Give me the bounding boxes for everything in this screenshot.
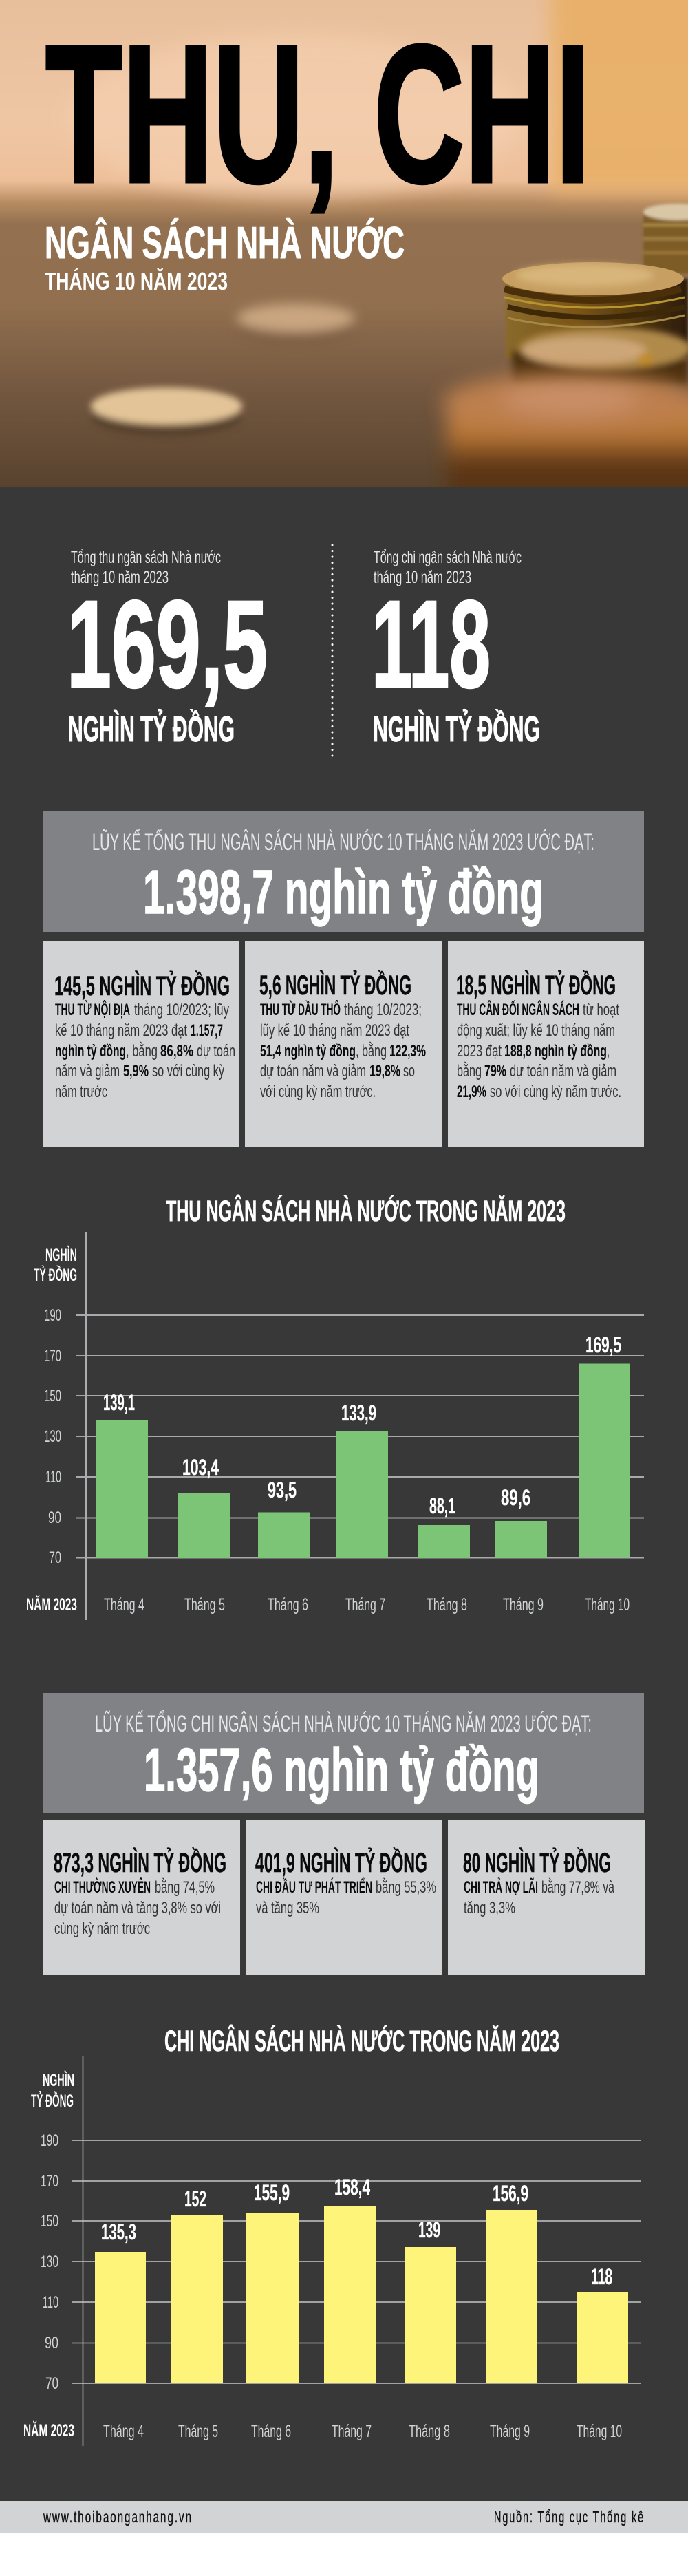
bar chart: monthly expenditure: 150 (41, 2212, 58, 2231)
subtitle: NGÂN SÁCH NHÀ NƯỚC (45, 217, 405, 268)
bar chart: monthly expenditure: 130 (41, 2253, 58, 2271)
bar chart: monthly expenditure: NĂM 2023 (23, 2420, 74, 2440)
coin: blurred coin over stack (513, 328, 688, 385)
bar chart: monthly expenditure: 139 (418, 2217, 440, 2242)
panel: interest payment expenditure: bằng 77,8% và (541, 1878, 614, 1897)
panel: regular expenditure: dự toán năm và tăng 3,8% so với (54, 1899, 221, 1917)
panel: crude oil revenue: 19,8% (369, 1062, 400, 1081)
key figure: total expenditure: Tổng chi ngân sách Nhà nước (374, 548, 522, 567)
bar chart: monthly expenditure: 110 (43, 2293, 58, 2312)
bar chart: monthly revenue: 169,5 (585, 1332, 621, 1357)
bar chart: monthly revenue: Tháng 8 (427, 1595, 467, 1615)
footer: www.thoibaonganhang.vn (43, 2508, 193, 2526)
panel: budget balance revenue (448, 941, 644, 1147)
panel: regular expenditure: bằng 74,5% (155, 1878, 215, 1897)
bar chart: monthly expenditure: Tháng 6 (251, 2422, 291, 2441)
panel: development investment expenditure: bằng 55,3% (376, 1878, 436, 1897)
panel: budget balance revenue: 188,8 nghìn tỷ đồng (504, 1042, 607, 1061)
bar chart: monthly revenue: Tháng 10 (585, 1595, 630, 1615)
bar chart: monthly expenditure: TỶ ĐỒNG (31, 2090, 74, 2111)
panel: domestic revenue: năm và giảm (55, 1062, 120, 1081)
panel: crude oil revenue: lũy kế 10 tháng năm 2023 đạt (260, 1021, 409, 1040)
panel: crude oil revenue: 5,6 NGHÌN TỶ ĐỒNG (259, 969, 411, 1001)
bar chart: monthly revenue: Tháng 9 (503, 1595, 544, 1615)
panel: budget balance revenue: động xuất; lũy kế 10 tháng năm (457, 1021, 615, 1040)
divider (332, 545, 333, 756)
bar chart: monthly expenditure: Tháng 8 (409, 2422, 450, 2441)
panel: interest payment expenditure (448, 1820, 645, 1975)
panel: crude oil revenue: dự toán năm và giảm (260, 1062, 366, 1081)
key figure: total revenue: tháng 10 năm 2023 (71, 568, 169, 587)
bar chart: monthly expenditure: Tháng 9 (490, 2422, 530, 2441)
panel: domestic revenue: nghìn tỷ đồng (55, 1042, 126, 1061)
panel: crude oil revenue: THU TỪ DẦU THÔ (260, 1000, 341, 1019)
coin: foreground blurred stack (434, 362, 688, 487)
panel: regular expenditure: 873,3 NGHÌN TỶ ĐỒNG (54, 1846, 226, 1878)
panel: development investment expenditure: và tăng 35% (256, 1899, 319, 1917)
bar chart: monthly expenditure: 156,9 (493, 2181, 528, 2206)
panel: budget balance revenue: dự toán năm và giảm (510, 1062, 616, 1081)
bar chart: monthly revenue: 103,4 (182, 1455, 219, 1480)
coin: sharp middle stack (502, 262, 688, 358)
panel: development investment expenditure (246, 1820, 442, 1975)
panel: crude oil revenue: 51,4 nghìn tỷ đồng (260, 1042, 356, 1061)
bar chart: monthly expenditure: Tháng 5 (178, 2422, 218, 2441)
bar chart: monthly expenditure: 170 (41, 2172, 58, 2191)
bar chart: monthly revenue: 90 (48, 1509, 61, 1527)
panel: budget balance revenue: 2023 đạt (457, 1042, 502, 1061)
panel: domestic revenue: năm trước (55, 1083, 107, 1101)
bar chart: monthly expenditure: 155,9 (254, 2180, 290, 2205)
bar chart: monthly revenue: 88,1 (429, 1493, 455, 1518)
panel: domestic revenue: so với cùng kỳ (152, 1062, 224, 1081)
panel: budget balance revenue: , (607, 1042, 610, 1061)
bar chart: monthly revenue: Tháng 4 (104, 1595, 144, 1615)
panel: regular expenditure (43, 1820, 240, 1975)
panel: budget balance revenue: từ hoạt (583, 1001, 619, 1019)
bar chart: monthly revenue: 89,6 (501, 1485, 530, 1510)
key figure: total expenditure: tháng 10 năm 2023 (374, 568, 471, 587)
panel: crude oil revenue: , bằng (356, 1042, 387, 1061)
hero photo: blurred coins on a table (0, 0, 688, 526)
bottom margin (0, 2533, 688, 2576)
bar chart: monthly revenue: TỶ ĐỒNG (34, 1264, 77, 1285)
panel: regular expenditure: CHI THƯỜNG XUYÊN (54, 1877, 151, 1897)
bar chart: monthly revenue: Tháng 7 (345, 1595, 385, 1615)
panel: budget balance revenue: bằng (457, 1062, 482, 1081)
bar chart: monthly expenditure: 135,3 (101, 2220, 136, 2244)
key figure: total revenue: NGHÌN TỶ ĐỒNG (68, 709, 235, 749)
panel: domestic revenue: THU TỪ NỘI ĐỊA (55, 1000, 130, 1019)
panel: crude oil revenue: với cùng kỳ năm trước. (260, 1083, 376, 1101)
panel: budget balance revenue: THU CÂN ĐỐI NGÂN SÁCH (457, 1000, 579, 1019)
bar chart: monthly revenue: 139,1 (103, 1390, 135, 1415)
bar chart: monthly expenditure: NGHÌN (43, 2070, 74, 2090)
bar chart: monthly revenue: 130 (44, 1427, 61, 1446)
panel: domestic revenue: , bằng (126, 1042, 158, 1061)
bar chart: monthly expenditure: 158,4 (334, 2175, 370, 2200)
key figure: total expenditure: NGHÌN TỶ ĐỒNG (373, 709, 540, 749)
bar chart: monthly revenue: NĂM 2023 (26, 1595, 77, 1615)
bar chart: monthly revenue: 170 (44, 1347, 61, 1365)
coin: blurred front coin (91, 387, 242, 436)
key figure: total revenue: Tổng thu ngân sách Nhà nước (71, 548, 221, 567)
bar chart: monthly revenue: 70 (49, 1548, 61, 1567)
panel: regular expenditure: cùng kỳ năm trước (54, 1919, 150, 1938)
subtitle date: THÁNG 10 NĂM 2023 (45, 267, 228, 295)
bar chart: monthly revenue: 110 (45, 1468, 61, 1487)
panel: domestic revenue: tháng 10/2023; lũy (134, 1001, 229, 1019)
panel: crude oil revenue: 122,3% (389, 1042, 426, 1061)
footer (0, 2501, 688, 2533)
panel: budget balance revenue: 21,9% (457, 1083, 486, 1101)
panel: budget balance revenue: 79% (484, 1062, 506, 1081)
key figure: total expenditure: 118 (372, 575, 491, 714)
coin: back right stack (643, 204, 688, 273)
bar chart: monthly revenue: 150 (44, 1387, 61, 1405)
bar chart: monthly expenditure: 90 (45, 2334, 58, 2352)
panel: interest payment expenditure: tăng 3,3% (464, 1899, 515, 1917)
panel: crude oil revenue: tháng 10/2023; (344, 1001, 422, 1019)
bar chart: monthly expenditure: 118 (591, 2264, 612, 2289)
panel: domestic revenue: 86,8% (160, 1042, 193, 1061)
coin: blurred middle coin (237, 304, 355, 341)
bar chart: monthly expenditure: Tháng 7 (332, 2422, 372, 2441)
panel: domestic revenue: 145,5 NGHÌN TỶ ĐỒNG (54, 970, 230, 1001)
panel: domestic revenue: 5,9% (123, 1062, 149, 1081)
panel: cumulative expenditure (43, 1693, 644, 1813)
bar chart: monthly revenue: NGHÌN (45, 1245, 77, 1265)
panel: crude oil revenue: so (403, 1062, 415, 1081)
panel: cumulative revenue (43, 811, 644, 932)
bar chart: monthly revenue: Tháng 6 (268, 1595, 308, 1615)
panel: development investment expenditure: CHI ĐẦU TƯ PHÁT TRIỂN (256, 1877, 372, 1897)
bar chart: monthly expenditure: 70 (45, 2374, 58, 2393)
bar chart: monthly revenue: 93,5 (268, 1478, 297, 1502)
key figure: total expenditure (372, 548, 540, 749)
panel: budget balance revenue: so với cùng kỳ năm trước. (490, 1083, 621, 1101)
bar chart: monthly revenue: 190 (44, 1306, 61, 1325)
panel: domestic revenue: kế 10 tháng năm 2023 đạt (55, 1021, 187, 1040)
bar chart: monthly revenue (26, 1232, 644, 1620)
bar chart: monthly expenditure: Tháng 10 (577, 2422, 622, 2441)
panel: domestic revenue: dự toán (197, 1042, 235, 1061)
bar chart: monthly expenditure: 190 (41, 2131, 58, 2150)
panel: domestic revenue: 1.157,7 (191, 1021, 223, 1040)
bar chart: monthly revenue: Tháng 5 (184, 1595, 225, 1615)
panel: domestic revenue (43, 941, 239, 1147)
panel: crude oil revenue (245, 941, 442, 1147)
panel: development investment expenditure: 401,9 NGHÌN TỶ ĐỒNG (255, 1846, 427, 1878)
key figure: total revenue: 169,5 (67, 575, 268, 714)
bar chart: monthly expenditure: Tháng 4 (103, 2422, 144, 2441)
key figure: total revenue (67, 548, 268, 749)
bar chart: monthly revenue: 133,9 (341, 1401, 376, 1425)
bar chart: monthly expenditure (23, 2056, 641, 2446)
panel: interest payment expenditure: CHI TRẢ NỢ LÃI (464, 1877, 538, 1897)
bar chart: monthly expenditure: 152 (184, 2186, 206, 2211)
